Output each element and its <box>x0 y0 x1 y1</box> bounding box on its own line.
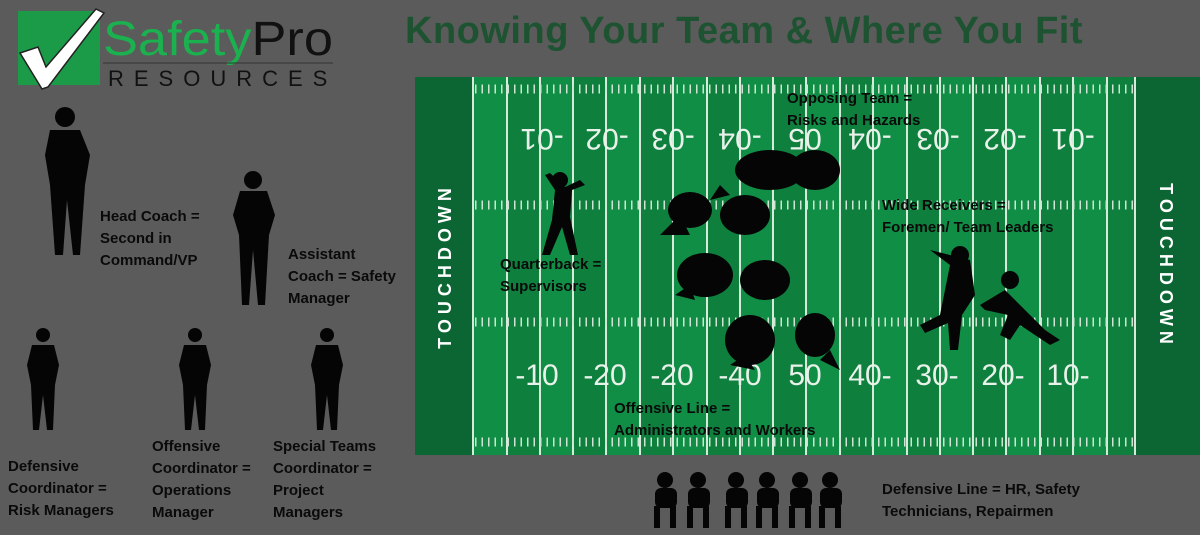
football field: 10- <box>1046 359 1090 392</box>
football field: 20- <box>981 359 1025 392</box>
label: head coach: Second in <box>100 230 172 247</box>
football field: -20 <box>583 359 627 392</box>
football field: 40- <box>848 359 892 392</box>
label: wide receivers: Foremen/ Team Leaders <box>882 219 1053 236</box>
label: defensive coordinator: Risk Managers <box>8 502 114 519</box>
football field <box>415 77 1200 455</box>
label: defensive line: Defensive Line = HR, Safety <box>882 481 1080 498</box>
label: opposing team: Risks and Hazards <box>787 112 920 129</box>
label: offensive line <box>614 400 815 439</box>
defensive line players <box>654 472 842 528</box>
football field: -20 <box>650 359 694 392</box>
football field: TOUCHDOWN <box>435 183 455 349</box>
football field: -04 <box>848 122 892 155</box>
football field: -01 <box>1051 122 1095 155</box>
label: offensive line: Offensive Line = <box>614 400 730 417</box>
label: assistant coach: Coach = Safety <box>288 268 396 285</box>
label: defensive line: Technicians, Repairmen <box>882 503 1053 520</box>
label: assistant coach: Manager <box>288 290 350 307</box>
football field: -02 <box>585 122 629 155</box>
football field: -03 <box>651 122 695 155</box>
football field: -10 <box>515 359 559 392</box>
coach silhouettes <box>27 107 343 430</box>
players on field <box>542 150 1060 370</box>
label: opposing team <box>787 90 920 129</box>
label: special teams: Coordinator = <box>273 460 372 477</box>
logo: Safety Pro <box>103 13 333 66</box>
label: wide receivers <box>882 197 1053 236</box>
football field: -04 <box>718 122 762 155</box>
football field: 30- <box>915 359 959 392</box>
label: assistant coach <box>288 246 396 307</box>
title: Knowing Your Team & Where You Fit <box>405 10 1083 52</box>
label: offensive coordinator: Coordinator = <box>152 460 251 477</box>
label: wide receivers: Wide Receivers = <box>882 197 1006 214</box>
label: defensive coordinator: Defensive <box>8 458 79 475</box>
football field: -02 <box>983 122 1027 155</box>
label: special teams: Project <box>273 482 324 499</box>
label: special teams: Special Teams <box>273 438 376 455</box>
label: quarterback: Supervisors <box>500 278 587 295</box>
label: assistant coach: Assistant <box>288 246 356 263</box>
label: head coach: Head Coach = <box>100 208 200 225</box>
label: special teams: Managers <box>273 504 343 521</box>
football field: 05 <box>788 122 822 155</box>
label: offensive coordinator: Operations <box>152 482 231 499</box>
label: offensive line: Administrators and Workers <box>614 422 815 439</box>
label: defensive coordinator: Coordinator = <box>8 480 107 497</box>
label: offensive coordinator: Offensive <box>152 438 220 455</box>
football field: -03 <box>916 122 960 155</box>
football field: -40 <box>718 359 762 392</box>
logo <box>18 8 337 90</box>
football field: TOUCHDOWN <box>1156 183 1176 349</box>
label: head coach <box>100 208 200 269</box>
label: offensive coordinator: Manager <box>152 504 214 521</box>
label: defensive coordinator <box>8 458 114 519</box>
quarterback <box>542 172 585 255</box>
label: offensive coordinator <box>152 438 251 521</box>
label: defensive line <box>882 481 1080 520</box>
football field: 50 <box>788 359 822 392</box>
football field: -01 <box>520 122 564 155</box>
label: quarterback <box>500 256 601 295</box>
label: opposing team: Opposing Team = <box>787 90 912 107</box>
label: quarterback: Quarterback = <box>500 256 601 273</box>
label: special teams <box>273 438 376 521</box>
label: head coach: Command/VP <box>100 252 198 269</box>
